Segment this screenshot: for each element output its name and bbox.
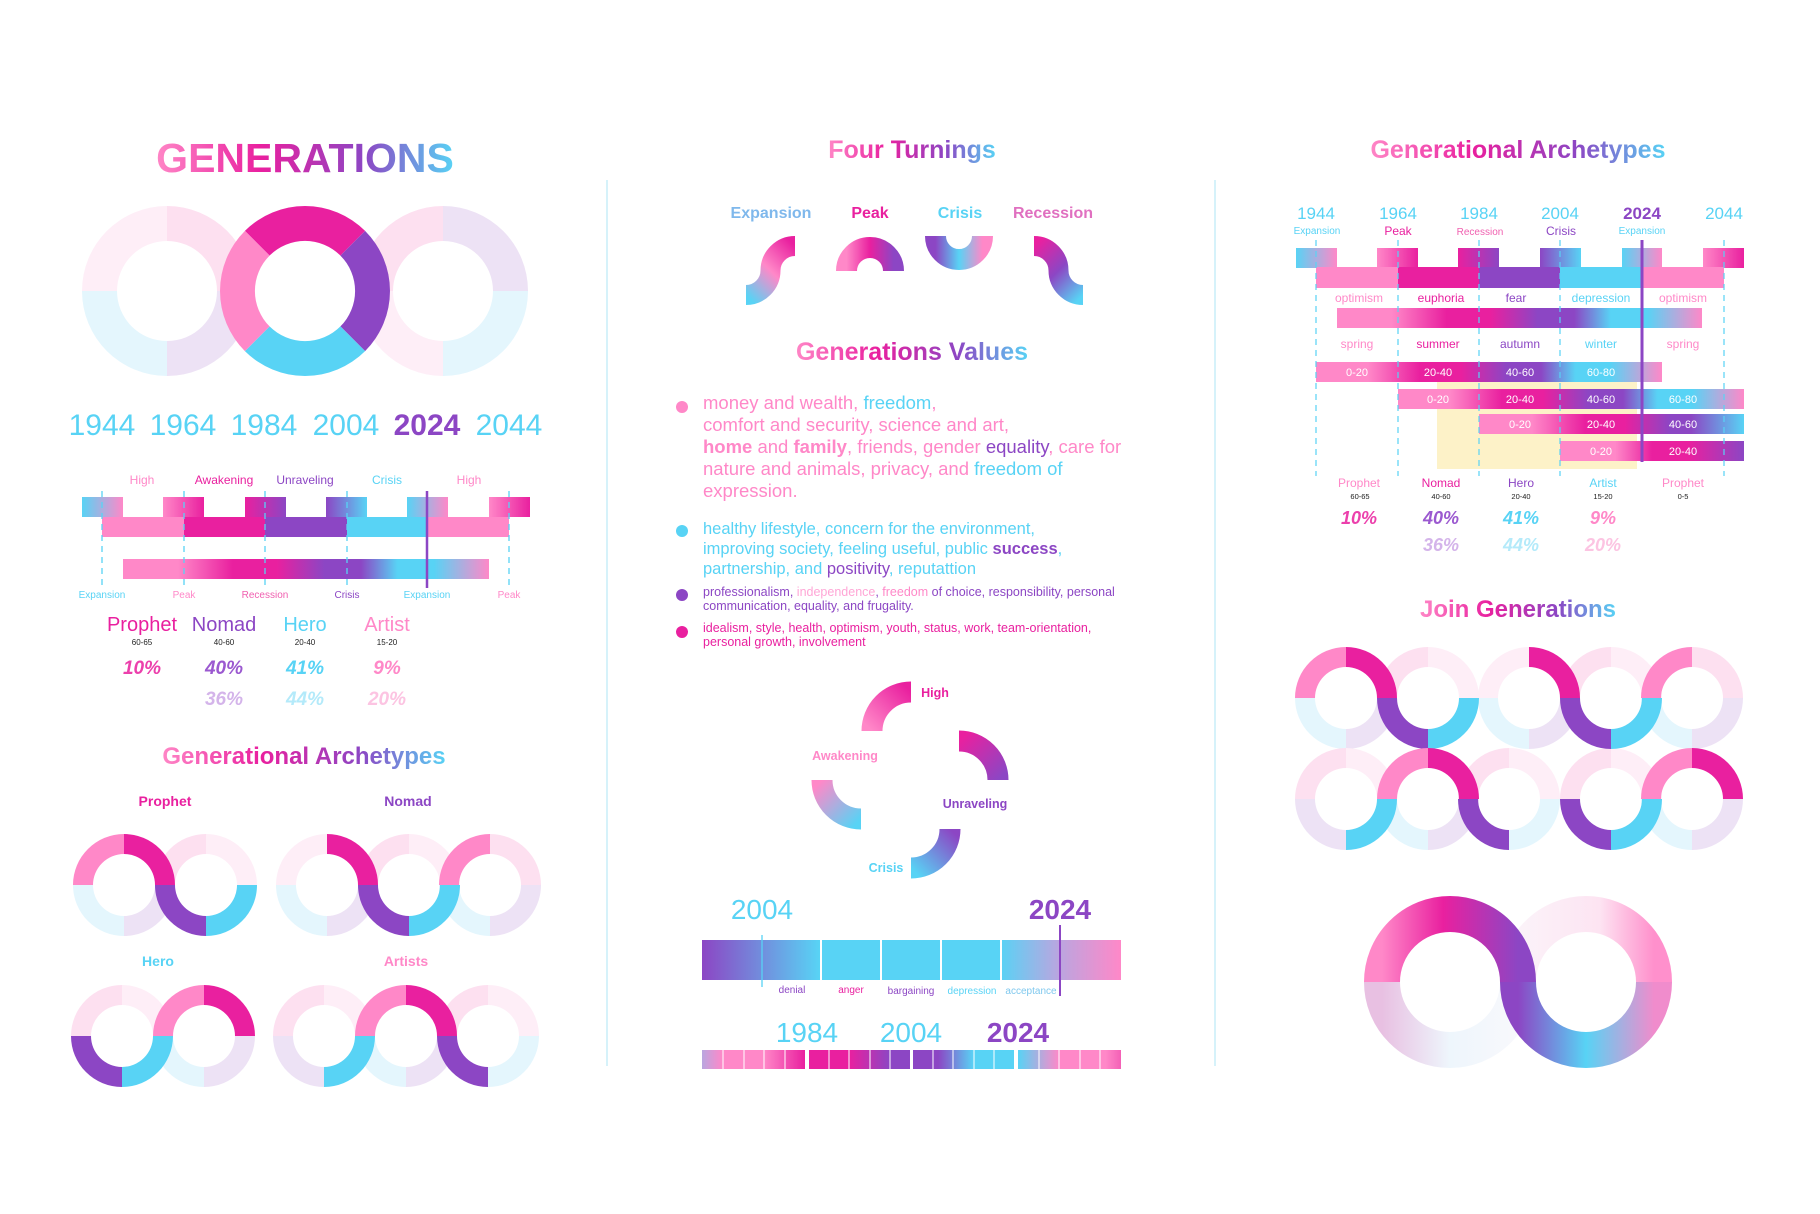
values list: personal growth, involvement bbox=[703, 635, 866, 649]
archetype timeline (right): 9% bbox=[1590, 508, 1616, 528]
archetype stats (left): Prophet bbox=[107, 614, 177, 636]
archetype stats (left): 10% bbox=[123, 658, 161, 679]
grief stages bar: denial bbox=[779, 985, 805, 996]
archetype timeline (right): depression bbox=[1572, 291, 1630, 305]
archetype stats (left): 36% bbox=[205, 689, 243, 710]
archetype timeline (right): 60-80 bbox=[1669, 394, 1697, 406]
archetype stats (left): 60-65 bbox=[132, 638, 153, 647]
divider lines bbox=[607, 180, 1215, 1066]
archetype stats (left): 9% bbox=[373, 658, 401, 679]
archetype timeline (right): spring bbox=[1667, 337, 1699, 351]
four turnings labels: Recession bbox=[1013, 205, 1093, 222]
grief stages bar: 2024 bbox=[1029, 894, 1092, 925]
archetype timeline (right): 60-80 bbox=[1587, 367, 1615, 379]
year row: 1984 bbox=[231, 409, 297, 442]
archetype timeline (right): 0-20 bbox=[1427, 394, 1449, 406]
archetype stats (left): 20% bbox=[367, 689, 406, 710]
grief stages bar: anger bbox=[838, 985, 864, 996]
turnings timeline (left) bbox=[79, 473, 530, 601]
values list bbox=[676, 392, 1121, 649]
turnings timeline (left): High bbox=[130, 473, 154, 487]
segmented year bar: 2024 bbox=[987, 1017, 1050, 1048]
icon: expansion S-curve bbox=[746, 246, 795, 295]
archetype timeline (right): 0-20 bbox=[1590, 446, 1612, 458]
archetype timeline (right): 20-40 bbox=[1424, 367, 1452, 379]
values list: comfort and security, science and art, bbox=[703, 414, 1009, 435]
archetype timeline (right): 20-40 bbox=[1511, 492, 1531, 501]
archetype timeline (right): 20-40 bbox=[1669, 446, 1697, 458]
archetype timeline (right): Expansion bbox=[1619, 226, 1665, 237]
four turnings labels: Peak bbox=[851, 205, 889, 222]
archetype: Hero bbox=[71, 953, 255, 1087]
archetype timeline (right): 20-40 bbox=[1506, 394, 1534, 406]
archetype timeline (right): Artist bbox=[1589, 476, 1617, 490]
archetype stats (left): 40-60 bbox=[214, 638, 235, 647]
archetype: Artists: Artists bbox=[384, 953, 428, 969]
archetype timeline (right): 40% bbox=[1422, 508, 1459, 528]
archetype timeline (right): Crisis bbox=[1546, 224, 1576, 238]
turnings timeline (left): Crisis bbox=[334, 590, 360, 601]
year row: 1964 bbox=[150, 409, 216, 442]
archetype timeline (right): Peak bbox=[1384, 224, 1413, 238]
turnings timeline (left): High bbox=[457, 473, 481, 487]
archetype timeline (right): 40-60 bbox=[1506, 367, 1534, 379]
four turnings labels bbox=[731, 205, 1093, 222]
archetype timeline (right): 20-40 bbox=[1587, 419, 1615, 431]
turnings timeline (left): Expansion bbox=[79, 590, 125, 601]
archetype stats (left): 44% bbox=[285, 689, 324, 710]
year row: 1944 bbox=[69, 409, 135, 442]
archetype timeline (right): winter bbox=[1584, 337, 1617, 351]
segmented year bar bbox=[702, 1017, 1121, 1069]
values list: idealism, style, health, optimism, youth, status, work, team-orientation, bbox=[703, 621, 1091, 635]
archetype timeline (right): euphoria bbox=[1418, 291, 1465, 305]
archetype timeline (right): 40-60 bbox=[1669, 419, 1697, 431]
archetype stats (left): Hero bbox=[283, 614, 327, 636]
turnings timeline (left): Recession bbox=[242, 590, 288, 601]
archetype timeline (right): 15-20 bbox=[1593, 492, 1613, 501]
values list: partnership, and positivity, reputattion bbox=[703, 560, 976, 578]
grief stages bar: 2004 bbox=[731, 894, 793, 925]
grief stages bar: bargaining bbox=[888, 986, 934, 997]
archetype timeline (right): 1944 bbox=[1297, 204, 1335, 223]
values list: healthy lifestyle, concern for the environment, bbox=[703, 520, 1035, 538]
archetype timeline (right): 2044 bbox=[1705, 204, 1743, 223]
archetype timeline (right): 1964 bbox=[1379, 204, 1417, 223]
turnings timeline (left): Peak bbox=[498, 590, 521, 601]
archetype timeline (right): 1984 bbox=[1460, 204, 1498, 223]
year row bbox=[69, 409, 542, 442]
archetype timeline (right): 0-5 bbox=[1678, 492, 1688, 501]
values list: nature and animals, privacy, and freedom of bbox=[703, 458, 1063, 479]
archetype timeline (right): optimism bbox=[1335, 291, 1383, 305]
archetype timeline (right): Prophet bbox=[1338, 476, 1381, 490]
archetype stats (left): Artist bbox=[364, 614, 410, 636]
year row: 2004 bbox=[313, 409, 379, 442]
archetype timeline (right): 2024 bbox=[1623, 204, 1661, 223]
archetype timeline (right): 60-65 bbox=[1350, 492, 1370, 501]
heading: Join Generations: Join Generations bbox=[1420, 596, 1616, 623]
grief stages bar bbox=[702, 894, 1121, 997]
values list: professionalism, independence, freedom of choice, responsibility, personal bbox=[703, 585, 1115, 599]
joined ring grid bbox=[1295, 647, 1743, 850]
year row: 2024 bbox=[394, 409, 461, 442]
values list: home and family, friends, gender equality, care for bbox=[703, 436, 1121, 457]
archetype: Nomad: Nomad bbox=[384, 793, 432, 809]
heading: Generational Archetypes (left): Generational Archetypes bbox=[162, 743, 446, 770]
segmented year bar: 1984 bbox=[776, 1017, 838, 1048]
title: GENERATIONS: GENERATIONS bbox=[156, 135, 454, 181]
archetype timeline (right): spring bbox=[1341, 337, 1373, 351]
year row: 2044 bbox=[476, 409, 542, 442]
archetype timeline (right): Recession bbox=[1457, 227, 1503, 238]
archetype stats (left): Nomad bbox=[192, 614, 256, 636]
archetype timeline (right): fear bbox=[1506, 291, 1526, 305]
turnings timeline (left): Expansion bbox=[404, 590, 450, 601]
archetype: Prophet bbox=[73, 793, 257, 936]
archetype: Nomad bbox=[276, 793, 541, 936]
archetype: Prophet: Prophet bbox=[139, 793, 192, 809]
archetype stats (left): 41% bbox=[285, 658, 324, 679]
archetype timeline (right): 41% bbox=[1502, 508, 1539, 528]
icon: recession S-curve bbox=[1034, 246, 1083, 295]
icon: peak arc bbox=[846, 248, 894, 271]
archetype timeline (right): 20% bbox=[1584, 535, 1621, 555]
archetype timeline (right): 0-20 bbox=[1509, 419, 1531, 431]
archetype stats (left): 20-40 bbox=[295, 638, 316, 647]
grief stages bar: depression bbox=[948, 986, 996, 997]
cycle diagram: Unraveling bbox=[943, 797, 1007, 811]
values list: money and wealth, freedom, bbox=[703, 392, 936, 413]
heading: Generational Archetypes (right): Generational Archetypes bbox=[1370, 136, 1666, 164]
values list: expression. bbox=[703, 480, 798, 501]
big ring chain bbox=[82, 206, 528, 376]
archetype timeline (right): Expansion bbox=[1294, 226, 1340, 237]
archetype: Artists bbox=[273, 953, 539, 1087]
four turnings labels: Crisis bbox=[938, 205, 982, 222]
big infinity symbol bbox=[1382, 914, 1654, 1050]
archetype stats (left): 40% bbox=[204, 658, 243, 679]
turnings timeline (left): Crisis bbox=[372, 473, 402, 487]
values list: improving society, feeling useful, public success, bbox=[703, 540, 1062, 558]
archetype stats (left) bbox=[107, 614, 410, 710]
archetype timeline (right): 40-60 bbox=[1431, 492, 1451, 501]
archetype timeline (right): Hero bbox=[1508, 476, 1534, 490]
archetype timeline (right): 36% bbox=[1423, 535, 1459, 555]
archetype timeline (right): autumn bbox=[1500, 337, 1540, 351]
grief stages bar: acceptance bbox=[1005, 986, 1057, 997]
archetype: Hero: Hero bbox=[142, 953, 174, 969]
turnings timeline (left): Peak bbox=[173, 590, 196, 601]
heading: Generations Values: Generations Values bbox=[796, 338, 1028, 366]
values list: communication, equality, and frugality. bbox=[703, 599, 914, 613]
archetype timeline (right): optimism bbox=[1659, 291, 1707, 305]
cycle diagram: High bbox=[921, 686, 949, 700]
archetype stats (left): 15-20 bbox=[377, 638, 398, 647]
icon: crisis arc bbox=[936, 236, 982, 260]
archetype timeline (right) bbox=[1294, 204, 1744, 555]
archetype timeline (right): 44% bbox=[1502, 535, 1539, 555]
cycle diagram: Crisis bbox=[869, 861, 903, 875]
cycle diagram bbox=[812, 686, 1007, 875]
archetype timeline (right): summer bbox=[1416, 337, 1460, 351]
archetype timeline (right): 0-20 bbox=[1346, 367, 1368, 379]
archetype timeline (right): 40-60 bbox=[1587, 394, 1615, 406]
four turnings labels: Expansion bbox=[731, 205, 811, 222]
turnings timeline (left): Awakening bbox=[195, 473, 253, 487]
turnings timeline (left): Unraveling bbox=[276, 473, 334, 487]
archetype timeline (right): 10% bbox=[1341, 508, 1377, 528]
segmented year bar: 2004 bbox=[880, 1017, 942, 1048]
heading: Four Turnings: Four Turnings bbox=[828, 136, 996, 164]
cycle diagram: Awakening bbox=[812, 749, 878, 763]
archetype timeline (right): 2004 bbox=[1541, 204, 1579, 223]
archetype timeline (right): Prophet bbox=[1662, 476, 1705, 490]
archetype timeline (right): Nomad bbox=[1422, 476, 1460, 490]
